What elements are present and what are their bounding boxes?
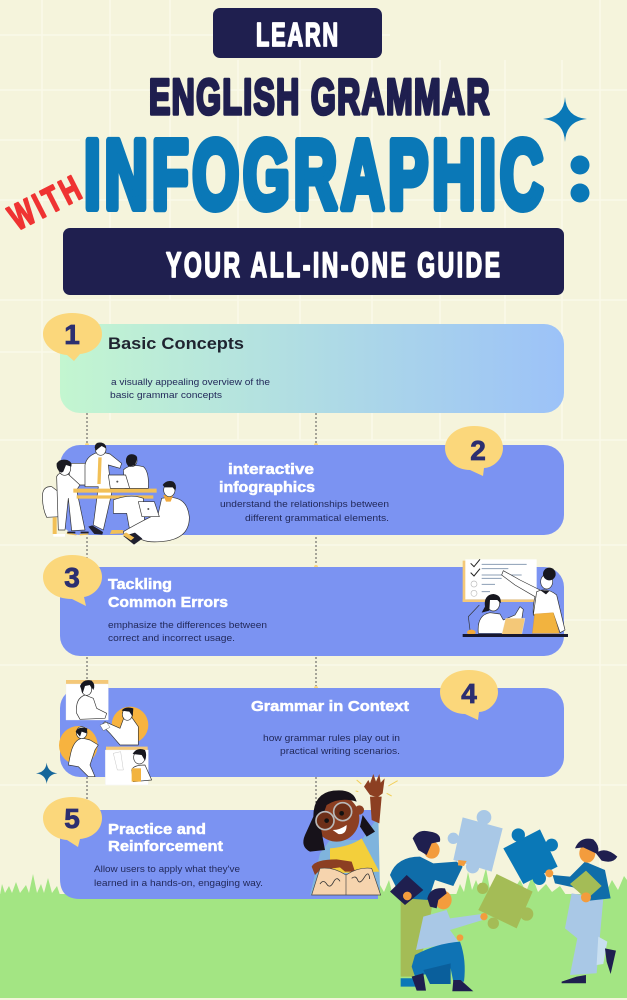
banner: your all-in-one guide [63,228,564,295]
body text [263,733,400,757]
illustration: classroom [463,559,568,637]
body text: correct and incorrect usage. [108,633,235,644]
person: woman [545,839,617,983]
badge 1: 1 [64,319,80,350]
illustration: team with puzzle pieces [390,810,617,991]
heading: Reinforcement [108,838,223,855]
panel 1: basic concepts [43,313,564,413]
badge 5 [43,797,102,847]
body text: basic grammar concepts [110,390,222,401]
colon [570,156,590,202]
illustration: team at table [42,443,189,545]
badge 4: 4 [461,678,477,709]
body text: Allow users to apply what they've [94,864,240,875]
panel 2: interactive infographics [42,426,564,545]
heading: with: WITH [2,167,91,238]
body text [220,499,389,524]
heading: interactive [228,461,314,478]
badge 5: 5 [64,803,80,834]
person: man holding piece [390,831,467,987]
icon: small star [36,763,57,784]
heading [108,821,223,855]
badge 2 [445,426,503,476]
heading: english grammar: ENGLISH GRAMMAR [149,69,491,125]
heading [219,461,315,496]
heading: Common Errors [108,594,228,611]
heading [108,576,228,611]
body text: emphasize the differences between [108,620,267,631]
badge 4 [440,670,498,720]
body text: understand the relationships between [220,499,389,510]
heading: Basic Concepts [108,334,244,353]
panel 4: grammar in context [36,670,564,785]
heading: Tackling [108,576,172,593]
puzzle: green [477,874,533,929]
body text: practical writing scenarios. [280,746,400,757]
icon: sparkle star [543,97,587,142]
panel 5: practice and reinforcement [43,797,378,899]
badge: learn [213,8,382,58]
illustration: people collaborating [36,680,152,785]
body text [94,864,263,889]
body text: a visually appealing overview of the [111,377,270,388]
badge: learn: LEARN [256,16,340,53]
body text: how grammar rules play out in [263,733,400,744]
badge 3: 3 [64,562,80,593]
banner: your all-in-one guide: YOUR ALL-IN-ONE GUIDE [166,246,502,285]
puzzle: blue [503,828,558,885]
body text [110,377,270,401]
heading: Grammar in Context [251,698,409,715]
badge 1 [43,313,102,361]
body text: learned in a hands-on, engaging way. [94,878,263,889]
illustration: girl reading [303,774,398,895]
badge 2: 2 [470,435,486,466]
badge 3 [43,555,102,606]
body text [108,620,267,644]
dotted connector lines [85,413,318,810]
heading: Practice and [108,821,206,838]
person: kneeling man [412,888,488,991]
heading: infographic: INFOGRAPHIC [84,121,547,230]
panel 3: tackling common errors [43,555,568,656]
grass ground [0,868,627,998]
body text: different grammatical elements. [245,513,389,524]
heading: infographics [219,479,315,496]
puzzle: light blue [448,810,503,873]
